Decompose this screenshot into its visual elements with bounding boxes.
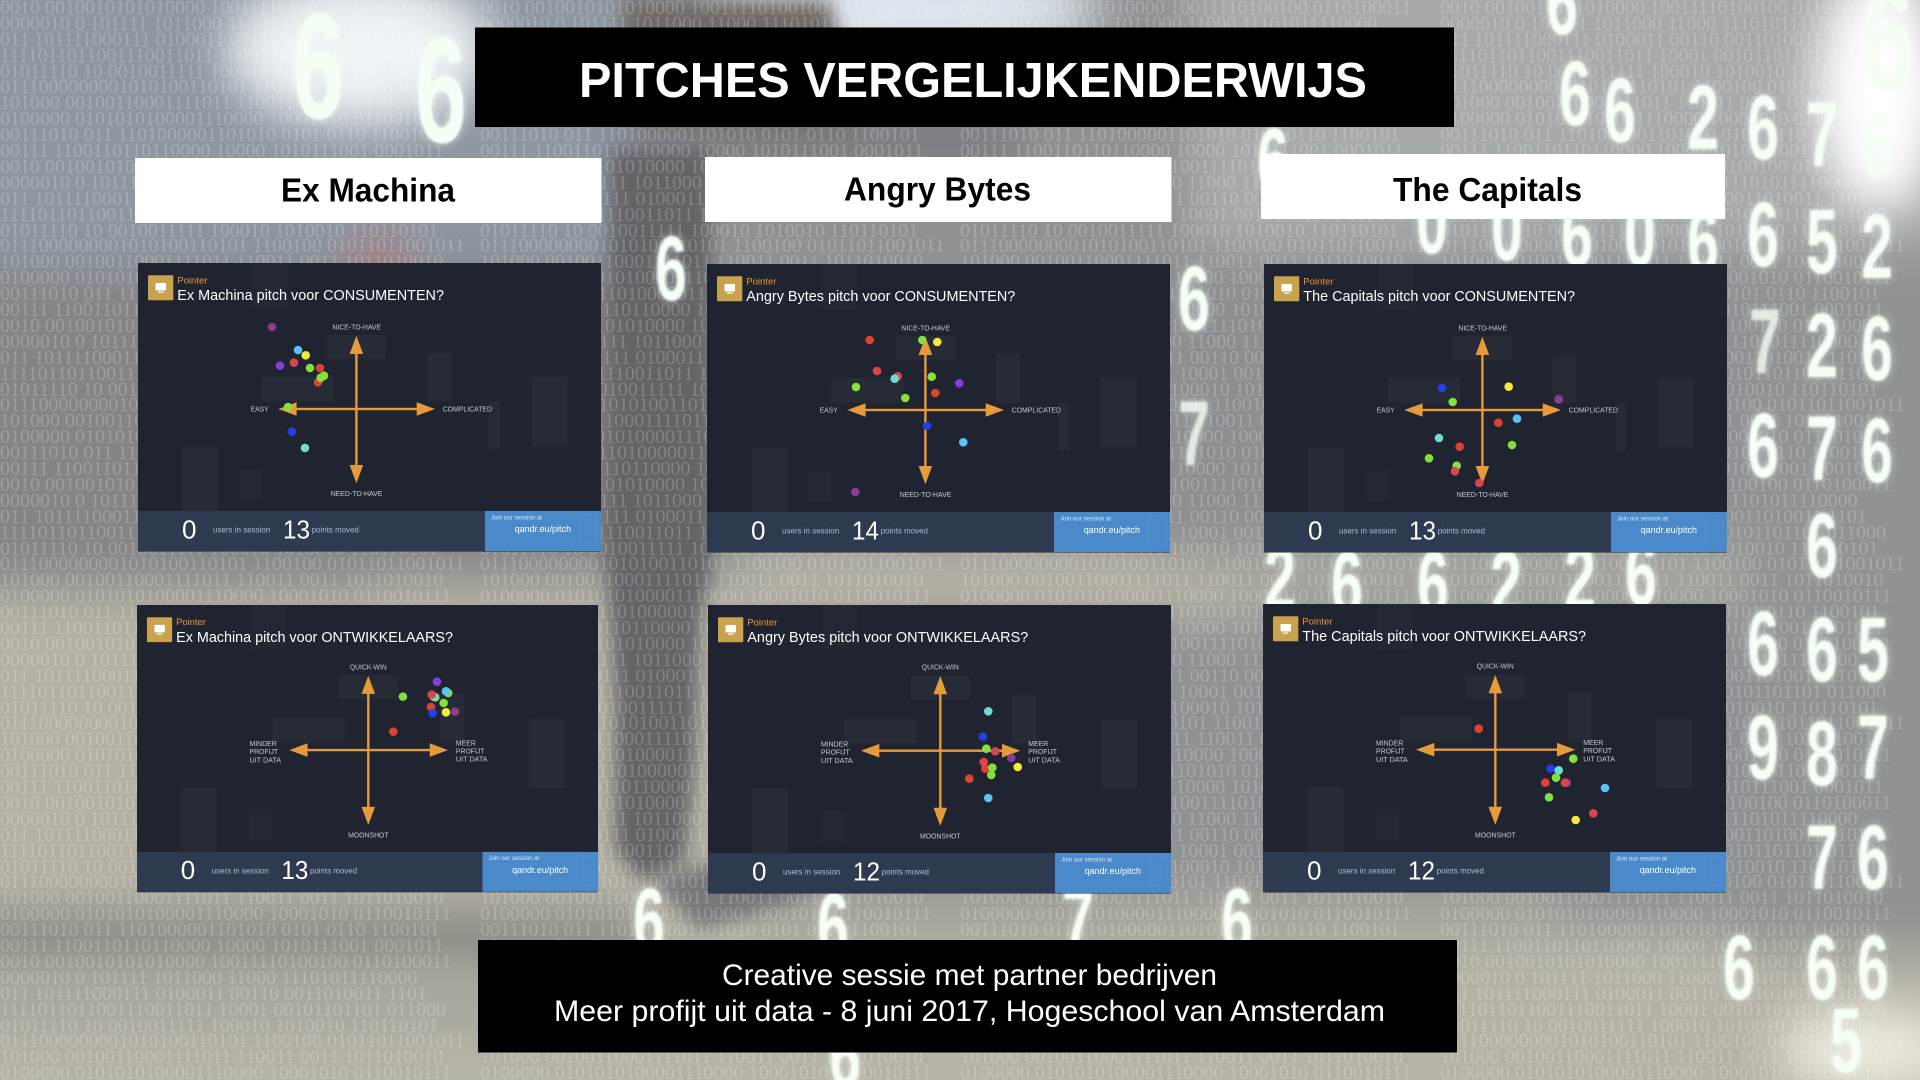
session stats footer: Join our session at	[491, 514, 542, 521]
quadrant axes and labels: QUICK-WIN	[922, 665, 959, 672]
session stats footer: 0	[1308, 515, 1322, 545]
big glowing digits: 6	[1625, 523, 1657, 625]
big glowing digits: 6	[1687, 191, 1719, 293]
footer banner	[478, 940, 1457, 1052]
panel heading: Pointer	[746, 276, 776, 287]
big glowing digits: 7	[1062, 870, 1094, 972]
session stats footer	[181, 855, 568, 885]
panel: The Capitals ontwikkelaars	[1263, 604, 1726, 892]
quadrant axes and labels	[820, 326, 1061, 499]
big glowing digits: 6	[1747, 184, 1779, 286]
quadrant axes and labels: UIT DATA	[821, 758, 853, 765]
quadrant axes and labels: PROFIJT	[821, 750, 850, 757]
big glowing digits: 6	[1806, 495, 1838, 597]
panel: Angry Bytes ontwikkelaars	[708, 605, 1171, 894]
big glowing digits: 8	[1806, 703, 1838, 805]
big glowing digits: 2	[1490, 533, 1522, 635]
session stats footer: Join our session at	[488, 855, 539, 862]
big glowing digits: 6	[1561, 184, 1593, 286]
quadrant axes and labels	[821, 665, 1060, 841]
scatter points	[1474, 724, 1609, 824]
session stats footer: 0	[181, 857, 195, 885]
panel: Ex Machina ontwikkelaars	[137, 605, 598, 892]
big glowing digits: 6	[1861, 298, 1893, 400]
big glowing digits: 7	[1749, 291, 1781, 393]
title banner: PITCHES VERGELIJKENDERWIJS	[579, 54, 1367, 108]
session stats footer: 14	[852, 515, 879, 545]
session stats footer: users in session	[212, 867, 269, 876]
scatter points	[851, 336, 968, 496]
big glowing digits: 6	[633, 870, 665, 972]
panel heading: Angry Bytes pitch voor ONTWIKKELAARS?	[747, 629, 1028, 646]
big glowing digits: 7	[1178, 383, 1210, 485]
panel heading	[747, 617, 1028, 646]
session stats footer: users in session	[783, 868, 840, 877]
panel heading	[1302, 616, 1586, 645]
quadrant axes and labels: COMPLICATED	[1569, 407, 1618, 414]
title banner	[475, 28, 1454, 127]
big glowing digits: 7	[1806, 84, 1838, 186]
session stats footer: 0	[751, 515, 765, 545]
panel heading: Ex Machina pitch voor CONSUMENTEN?	[177, 287, 444, 304]
session stats footer: users in session	[1339, 527, 1396, 536]
quadrant axes and labels	[250, 664, 488, 840]
quadrant axes and labels: MEER	[1028, 741, 1048, 748]
column heading: Angry Bytes	[705, 157, 1172, 222]
quadrant axes and labels: NICE-TO-HAVE	[332, 325, 381, 332]
quadrant axes and labels: EASY	[1377, 407, 1395, 414]
quadrant axes and labels: PROFIJT	[250, 749, 279, 756]
session stats footer: points moved	[1437, 867, 1484, 876]
session stats footer: 12	[1408, 855, 1435, 885]
big glowing digits: 6	[1747, 593, 1779, 695]
panel heading: Pointer	[1302, 616, 1332, 627]
big glowing digits: 6	[655, 218, 687, 320]
panel heading	[746, 276, 1015, 305]
session stats footer: Join our session at	[1061, 856, 1112, 863]
big glowing digits: 7	[1806, 398, 1838, 500]
quadrant axes and labels: COMPLICATED	[443, 406, 492, 413]
big glowing digits: 6	[1221, 870, 1253, 972]
quadrant axes and labels: EASY	[251, 406, 269, 413]
session stats footer: Join our session at	[1617, 515, 1668, 522]
quadrant axes and labels: UIT DATA	[456, 757, 488, 764]
big glowing digits: 0	[1624, 184, 1656, 286]
column heading: The Capitals: The Capitals	[1393, 171, 1582, 208]
big glowing digits: 6	[1857, 807, 1889, 909]
quadrant axes and labels: UIT DATA	[250, 757, 281, 764]
big glowing digits: 6	[1417, 533, 1449, 635]
session stats footer: qandr.eu/pitch	[1084, 525, 1140, 535]
scatter points	[389, 677, 459, 736]
session stats footer: Join our session at	[1060, 515, 1111, 522]
quadrant axes and labels: EASY	[820, 407, 838, 414]
session stats footer: 13	[1409, 515, 1436, 545]
quadrant axes and labels: MOONSHOT	[1475, 833, 1516, 840]
panel: Angry Bytes consumenten	[707, 264, 1170, 552]
big glowing digits: 2	[1264, 528, 1296, 630]
quadrant axes and labels: NEED-TO-HAVE	[1457, 492, 1509, 499]
session stats footer: qandr.eu/pitch	[1085, 866, 1141, 876]
quadrant axes and labels	[1376, 664, 1615, 840]
panel heading	[177, 275, 444, 304]
panel heading: Angry Bytes pitch voor CONSUMENTEN?	[746, 288, 1015, 305]
quadrant axes and labels: NICE-TO-HAVE	[1458, 326, 1507, 333]
column heading: The Capitals	[1261, 154, 1725, 219]
panel heading: Ex Machina pitch voor ONTWIKKELAARS?	[176, 629, 453, 646]
session stats footer: points moved	[312, 526, 359, 535]
quadrant axes and labels: NEED-TO-HAVE	[331, 491, 383, 498]
quadrant axes and labels: QUICK-WIN	[350, 664, 387, 671]
session stats footer: users in session	[213, 526, 270, 535]
session stats footer: qandr.eu/pitch	[512, 865, 568, 875]
session stats footer	[1308, 515, 1697, 545]
session stats footer: 0	[752, 856, 766, 886]
panel heading	[176, 617, 453, 646]
session stats footer	[1307, 855, 1696, 885]
session stats footer: qandr.eu/pitch	[1640, 865, 1696, 875]
quadrant axes and labels	[1377, 326, 1618, 499]
big glowing digits: 6	[1806, 599, 1838, 701]
quadrant axes and labels: MOONSHOT	[348, 833, 389, 840]
session stats footer: points moved	[882, 868, 929, 877]
session stats footer: users in session	[782, 527, 839, 536]
big glowing digits: 7	[1806, 807, 1838, 909]
big glowing digits: 9	[1747, 697, 1779, 799]
panel: Ex Machina consumenten	[138, 263, 601, 552]
column heading: Angry Bytes: Angry Bytes	[844, 170, 1031, 208]
session stats footer	[752, 856, 1141, 886]
session stats footer: points moved	[1438, 527, 1485, 536]
quadrant axes and labels: COMPLICATED	[1012, 407, 1061, 414]
session stats footer: 13	[283, 514, 310, 544]
panel heading: Pointer	[1303, 276, 1333, 287]
quadrant axes and labels: NICE-TO-HAVE	[901, 326, 950, 333]
quadrant axes and labels: PROFIJT	[1028, 749, 1058, 756]
big glowing digits: 6	[415, 7, 467, 174]
big glowing digits: 2	[1861, 196, 1893, 298]
quadrant axes and labels: PROFIJT	[1376, 749, 1405, 756]
big glowing digits: 6	[1747, 395, 1779, 497]
session stats footer: 13	[281, 857, 308, 885]
session stats footer: 0	[1307, 855, 1321, 885]
big glowing digits: 6	[817, 875, 849, 977]
footer banner: Creative sessie met partner bedrijven	[722, 959, 1217, 992]
quadrant axes and labels: QUICK-WIN	[1477, 664, 1514, 671]
footer banner: Meer profijt uit data - 8 juni 2017, Hogeschool van Amsterdam	[554, 995, 1385, 1028]
session stats footer: 0	[182, 514, 196, 544]
quadrant axes and labels: UIT DATA	[1028, 757, 1060, 764]
big glowing digits: 6	[1747, 77, 1779, 179]
session stats footer: points moved	[310, 867, 357, 876]
session stats footer: Join our session at	[1616, 855, 1667, 862]
session stats footer: qandr.eu/pitch	[1641, 525, 1697, 535]
big glowing digits: 6	[1861, 400, 1893, 502]
big glowing digits: 2	[1564, 528, 1596, 630]
quadrant axes and labels: PROFIJT	[456, 748, 485, 755]
big glowing digits: 6	[1806, 917, 1838, 1019]
scatter points	[1425, 382, 1563, 487]
big glowing digits: 6	[1723, 917, 1755, 1019]
quadrant axes and labels: MOONSHOT	[920, 834, 961, 841]
big glowing digits: 6	[1178, 248, 1210, 350]
session stats footer: points moved	[881, 527, 928, 536]
big glowing digits: 2	[1687, 67, 1719, 169]
big glowing digits: 6	[1559, 43, 1591, 145]
session stats footer: qandr.eu/pitch	[515, 524, 571, 534]
big glowing digits: 0	[1491, 178, 1523, 280]
big glowing digits: 6	[1861, 95, 1893, 197]
big glowing digits: 6	[1604, 60, 1636, 162]
big glowing digits: 7	[1857, 697, 1889, 799]
quadrant axes and labels: PROFIJT	[1583, 748, 1613, 755]
panel: The Capitals consumenten	[1264, 264, 1727, 552]
quadrant axes and labels: MINDER	[250, 741, 277, 748]
scatter points	[965, 707, 1022, 802]
scatter points	[268, 323, 328, 452]
quadrant axes and labels: UIT DATA	[1376, 757, 1408, 764]
quadrant axes and labels: NEED-TO-HAVE	[900, 492, 952, 499]
quadrant axes and labels: UIT DATA	[1583, 756, 1615, 763]
quadrant axes and labels: MEER	[456, 740, 476, 747]
panel heading: Pointer	[177, 275, 207, 286]
session stats footer: users in session	[1338, 867, 1395, 876]
panel heading: The Capitals pitch voor ONTWIKKELAARS?	[1302, 628, 1586, 645]
big glowing digits: 2	[1806, 295, 1838, 397]
big glowing digits: 6	[1857, 917, 1889, 1019]
big glowing digits: 6	[1331, 533, 1363, 635]
big glowing digits: 6	[1257, 110, 1289, 212]
quadrant axes and labels	[251, 325, 492, 498]
session stats footer	[751, 515, 1140, 545]
panel heading	[1303, 276, 1575, 305]
panel heading: Pointer	[176, 617, 206, 628]
big glowing digits: 5	[1857, 599, 1889, 701]
session stats footer: 12	[853, 856, 880, 886]
quadrant axes and labels: MEER	[1583, 740, 1603, 747]
big glowing digits: 0	[1416, 171, 1448, 273]
panel heading: The Capitals pitch voor CONSUMENTEN?	[1303, 288, 1575, 305]
panel heading: Pointer	[747, 617, 777, 628]
quadrant axes and labels: MINDER	[1376, 741, 1403, 748]
big glowing digits: 5	[1806, 191, 1838, 293]
column heading: Ex Machina	[135, 158, 602, 223]
session stats footer	[182, 514, 571, 544]
quadrant axes and labels: MINDER	[821, 742, 848, 749]
column heading: Ex Machina: Ex Machina	[281, 172, 456, 208]
